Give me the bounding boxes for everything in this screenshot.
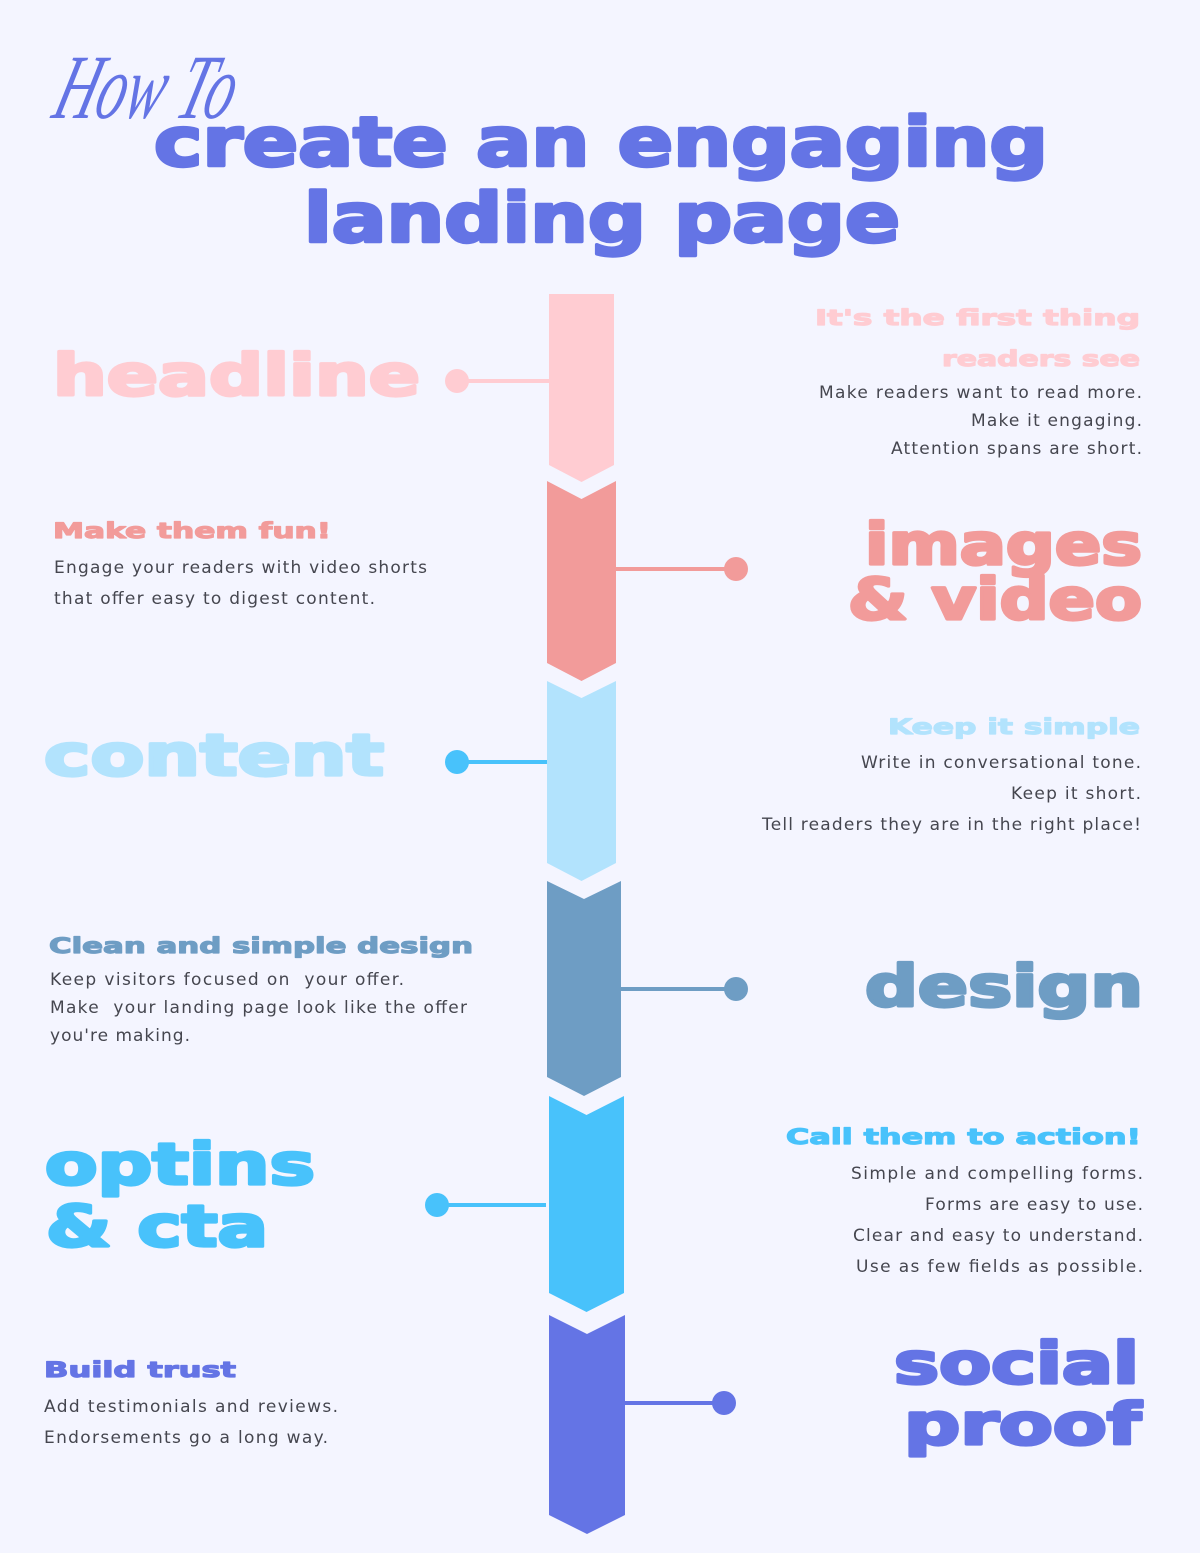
- body text: content: [761, 753, 1141, 835]
- panel: social proof: [44, 1331, 1143, 1458]
- heading: headline: headline: [53, 343, 420, 409]
- body text: content: Write in conversational tone.: [861, 753, 1141, 773]
- subheading: clean and simple design: Clean and simple design: [49, 934, 473, 959]
- body text: social proof: Endorsements go a long way.: [44, 1428, 328, 1448]
- subheading: readers see: readers see: [942, 347, 1140, 372]
- body text: images: [54, 558, 427, 609]
- panel: headline: [53, 306, 1142, 459]
- heading: proof: proof: [904, 1392, 1143, 1458]
- connector: optins: [425, 1193, 546, 1217]
- subheading: keep it simple: Keep it simple: [888, 715, 1140, 740]
- panel: central chevron column: [547, 294, 625, 1534]
- body text: optins: Clear and easy to understand.: [853, 1226, 1143, 1246]
- body text: optins: [851, 1164, 1143, 1277]
- heading: and video: & video: [848, 567, 1142, 633]
- heading: content: content: [44, 723, 384, 789]
- heading: design: design: [865, 954, 1143, 1020]
- heading: social: social: [894, 1331, 1139, 1397]
- connector: images: [616, 557, 748, 581]
- panel: optins and cta: [45, 1125, 1143, 1277]
- connector: headline: [445, 369, 549, 393]
- heading: optins: optins: [45, 1132, 315, 1198]
- body text: design: [50, 970, 467, 1046]
- subheading: build trust: Build trust: [44, 1358, 236, 1383]
- body text: optins: Forms are easy to use.: [925, 1195, 1143, 1215]
- title: [43, 37, 1048, 258]
- connector: social proof: [625, 1391, 736, 1415]
- panel: images and video: [53, 512, 1142, 633]
- body text: content: Keep it short.: [1011, 784, 1141, 804]
- body text: design: Keep visitors focused on your offer.: [50, 970, 404, 990]
- connector: content: [445, 750, 547, 774]
- chevron: optins and cta: [549, 1096, 624, 1312]
- subheading: call them to action: Call them to action!: [786, 1125, 1141, 1150]
- panel: design: [49, 934, 1143, 1046]
- main title line 2: landing page: [304, 180, 900, 258]
- body text: social proof: [44, 1397, 338, 1448]
- body text: social proof: Add testimonials and reviews.: [44, 1397, 338, 1417]
- chevron: social proof: [549, 1315, 625, 1534]
- panel: content: [44, 715, 1141, 835]
- body text: headline: Make it engaging.: [971, 411, 1142, 431]
- body text: design: you're making.: [50, 1026, 190, 1046]
- heading: images: images: [865, 512, 1142, 578]
- script heading: How To: How To: [43, 37, 251, 139]
- body text: content: Tell readers they are in the right place!: [761, 815, 1141, 835]
- subheading: first thing: It's the first thing: [815, 306, 1140, 331]
- body text: images: Engage your readers with video shorts: [54, 558, 427, 578]
- body text: headline: Make readers want to read more.: [819, 383, 1142, 403]
- body text: images: that offer easy to digest content.: [54, 589, 375, 609]
- main title line 1: create an engaging: [154, 104, 1048, 182]
- chevron: headline: [549, 294, 614, 482]
- chevron: design: [547, 881, 621, 1096]
- body text: optins: Simple and compelling forms.: [851, 1164, 1143, 1184]
- body text: headline: Attention spans are short.: [891, 439, 1142, 459]
- subheading: make them fun: Make them fun!: [53, 519, 331, 544]
- connector: design: [621, 977, 748, 1001]
- chevron: content: [547, 681, 616, 881]
- body text: headline: [819, 383, 1142, 459]
- body text: optins: Use as few fields as possible.: [856, 1257, 1143, 1277]
- heading: and cta: & cta: [46, 1194, 268, 1260]
- chevron: images and video: [547, 481, 616, 681]
- body text: design: Make your landing page look like the offer: [50, 998, 467, 1018]
